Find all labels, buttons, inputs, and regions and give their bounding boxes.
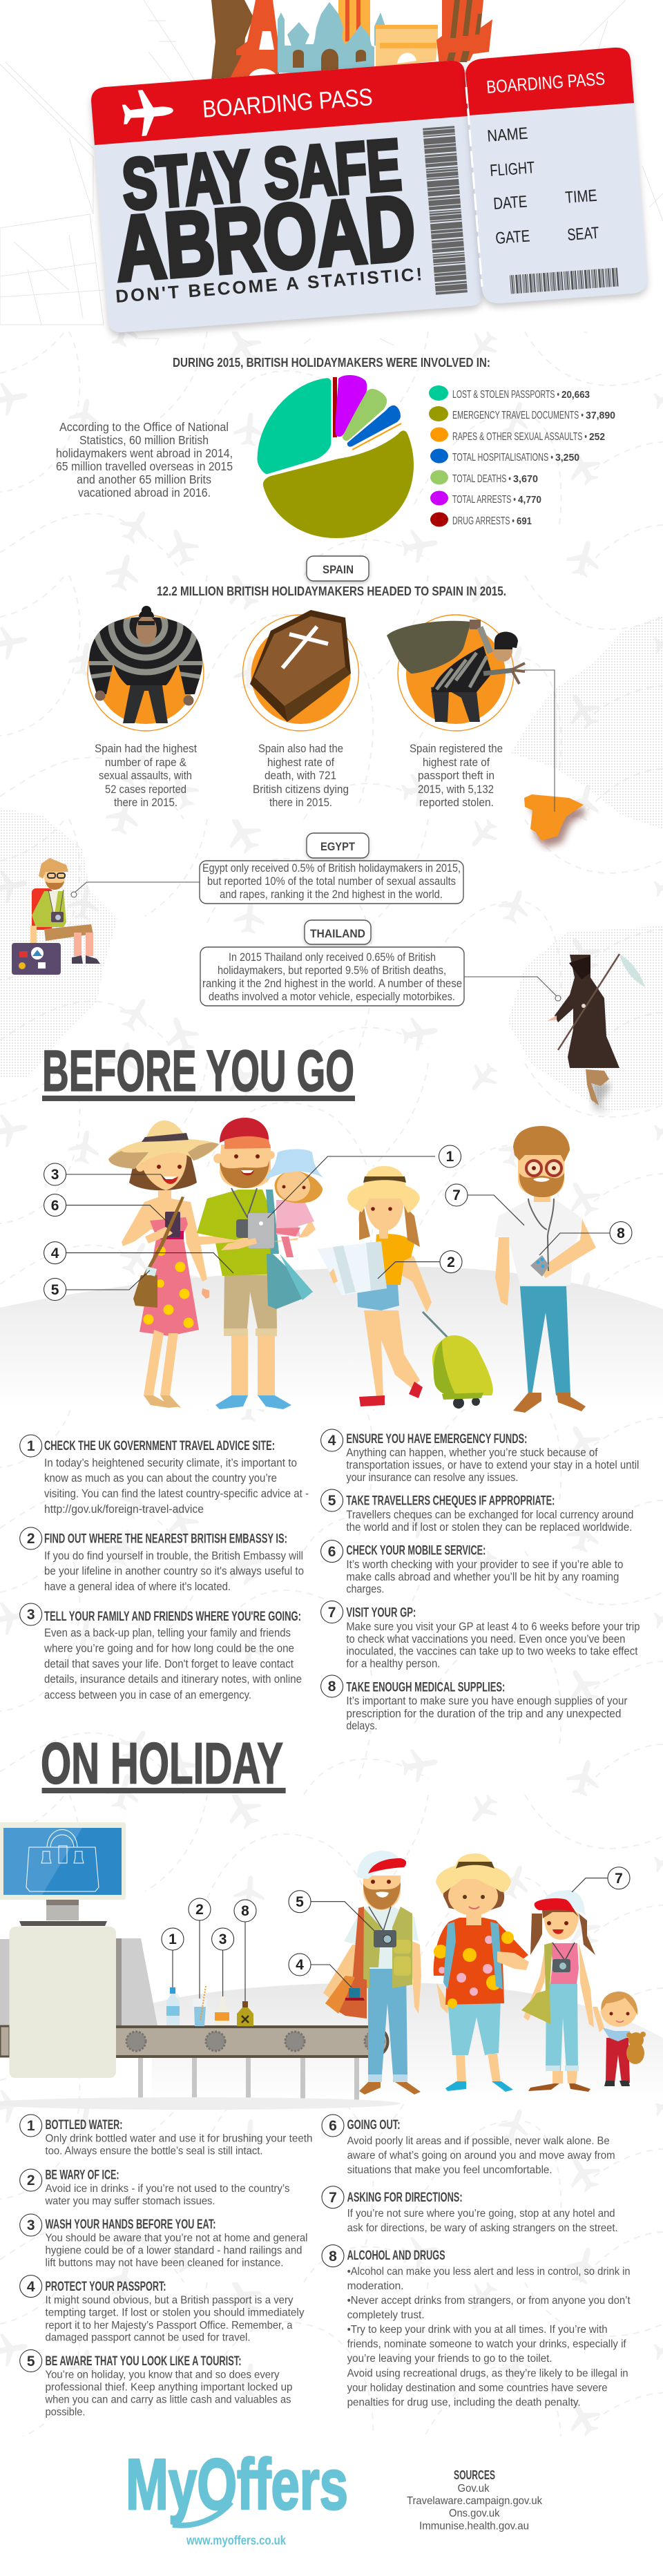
stub barcode	[510, 277, 618, 285]
sources: Ons.gov.uk	[449, 2508, 500, 2519]
list: on holiday right column: moderation.	[347, 2280, 404, 2292]
caption: death statistic: Spain also had the	[258, 742, 343, 755]
panel: death statistic illustration	[243, 610, 359, 731]
list: on holiday right column: •Alcohol can make you less alert and less in control, so drink in	[347, 2266, 631, 2278]
boarding pass main ticket	[91, 61, 482, 332]
list: on holiday right column: •Never accept drinks from strangers, or from anyone you don’t	[347, 2295, 631, 2307]
list: before you go right column: 6	[328, 1544, 336, 1560]
list: before you go right column: It’s important to make sure you have enough supplies of your	[346, 1695, 628, 1708]
panel: egypt text: but reported 10% of the total number of sexual assaults	[207, 875, 456, 888]
list: before you go right column: make calls abroad and whether you’ll be hit by any roaming	[346, 1570, 619, 1583]
character: toddler with teddy	[593, 1992, 646, 2086]
list: on holiday right column: penalties for drug use, including the death penalty.	[347, 2396, 581, 2408]
legend: 20,663	[561, 389, 590, 401]
list: on holiday right column: 8	[329, 2249, 337, 2264]
panel: egypt text: Egypt only received 0.5% of British holidaymakers in 2015,	[202, 861, 461, 875]
list: before you go right column: the world and if lost or stolen they can be replaced worldwide.	[346, 1520, 632, 1534]
list: before you go left column: be your lifeline in another country so it's always useful to	[44, 1564, 304, 1578]
list: on holiday right column: Avoid poorly lit areas and if possible, never walk alone. Be	[347, 2135, 610, 2147]
list: before you go right column: 8	[328, 1679, 336, 1695]
legend: 691	[517, 515, 532, 527]
legend: TOTAL HOSPITALISATIONS •	[452, 452, 553, 464]
legend: LOST & STOLEN PASSPORTS •	[452, 389, 559, 401]
list: before you go right column: TAKE ENOUGH MEDICAL SUPPLIES:	[346, 1680, 505, 1695]
panel: thailand text: In 2015 Thailand only received 0.65% of British	[229, 951, 436, 964]
ground	[0, 1267, 663, 1409]
callouts before you go: 6	[51, 1198, 59, 1214]
title: abroad: ABROAD	[112, 177, 419, 300]
panel: egypt text: and rapes, ranking it the 2nd highest in the world.	[220, 888, 443, 901]
callouts before you go: 8	[617, 1225, 625, 1241]
legend: 3,670	[513, 473, 538, 485]
panel: thailand text: ranking it the 2nd highest in the world. A number of these	[202, 977, 462, 990]
sources	[407, 2468, 543, 2532]
list: before you go left column: TELL YOUR FAMILY AND FRIENDS WHERE YOU'RE GOING:	[44, 1610, 301, 1624]
list: on holiday right column: you’re leaving your friends to go to the toilet.	[347, 2353, 552, 2365]
list: on holiday left column: water you may suffer stomach issues.	[45, 2195, 215, 2207]
legend: 3,250	[555, 452, 579, 464]
caption: death statistic: there in 2015.	[269, 796, 332, 809]
list: on holiday right column: ALCOHOL AND DRUGS	[347, 2249, 445, 2263]
caption: passport statistic: passport theft in	[418, 769, 494, 782]
callouts on holiday	[162, 1867, 630, 2001]
list: before you go left column: access between you in case of an emergency.	[44, 1688, 251, 1701]
list: before you go right column: It’s worth checking with your provider to see if you’re able to	[346, 1558, 623, 1571]
character: man with tablet and child	[195, 1118, 323, 1395]
list: before you go right column: delays.	[346, 1719, 377, 1733]
sources: Gov.uk	[457, 2483, 490, 2494]
caption: passport statistic	[410, 742, 503, 809]
list: on holiday left column: professional thief. Keep anything important locked up	[46, 2382, 293, 2394]
panel: passport theft illustration	[387, 615, 525, 731]
sources: SOURCES	[454, 2468, 495, 2482]
legend: TOTAL DEATHS •	[452, 473, 511, 485]
legend: DRUG ARRESTS •	[452, 515, 515, 527]
stub fields: FLIGHT	[489, 158, 536, 180]
landmarks illustration	[211, 0, 492, 80]
main barcode	[439, 127, 452, 294]
map: thailand	[586, 1069, 611, 1114]
list: before you go left column: visiting. You can find the latest country-specific advice at -	[44, 1487, 309, 1500]
badge: thailand: THAILAND	[310, 927, 365, 940]
caption: passport statistic: 2015, with 5,132	[418, 783, 494, 796]
sources: Immunise.health.gov.au	[419, 2520, 529, 2532]
list: before you go left column: have a general idea of where it's located.	[44, 1580, 231, 1593]
callouts before you go: 7	[452, 1187, 461, 1203]
intro text	[56, 420, 233, 499]
list: on holiday left column: Only drink bottled water and use it for brushing your teeth	[46, 2133, 312, 2144]
list: before you go right column: to check what vaccinations you need. Even once you’ve been	[346, 1632, 625, 1645]
list: on holiday right column: 6	[329, 2118, 337, 2134]
icon: plane	[121, 87, 175, 137]
legend: EMERGENCY TRAVEL DOCUMENTS •	[452, 410, 584, 421]
list: on holiday left column: 2	[27, 2173, 35, 2188]
intro text: 65 million travelled overseas in 2015	[56, 459, 233, 473]
callouts on holiday: 4	[296, 1957, 304, 1973]
stub fields	[486, 124, 600, 248]
caption: death statistic: death, with 721	[265, 769, 336, 782]
caption: death statistic	[253, 742, 349, 809]
caption: death statistic: British citizens dying	[253, 783, 349, 796]
panel: rape statistic illustration	[87, 606, 204, 732]
caption: passport statistic: reported stolen.	[419, 796, 494, 809]
list: on holiday right column: If you’re not sure where you’re going, stop at any hotel and	[347, 2208, 615, 2220]
list: on holiday left column: when you can and carry as little cash and valuables as	[45, 2394, 291, 2405]
stub fields: TIME	[564, 187, 597, 207]
list: before you go left column: detail that saves your life. Don't forget to leave contact	[44, 1657, 294, 1670]
pie chart	[258, 375, 414, 538]
list: before you go right column: prescription for the duration of the trip and any unexpected	[346, 1707, 621, 1720]
background world map dots	[0, 615, 663, 1112]
list: before you go left column: FIND OUT WHERE THE NEAREST BRITISH EMBASSY IS:	[44, 1532, 287, 1546]
list: before you go left column: 1	[27, 1438, 35, 1454]
list: on holiday right column: GOING OUT:	[347, 2118, 401, 2133]
list: on holiday left column: possible.	[46, 2406, 86, 2418]
caption: rape statistic: number of rape &	[105, 756, 187, 769]
callouts on holiday: 2	[195, 1902, 204, 1918]
ground holiday	[152, 1983, 663, 2103]
heading: during 2015: DURING 2015, BRITISH HOLIDAYMAKERS WERE INVOLVED IN:	[173, 356, 490, 370]
stub fields: DATE	[492, 192, 528, 213]
callouts before you go: 5	[51, 1282, 59, 1298]
intro text: vacationed abroad in 2016.	[78, 486, 211, 499]
legend: 4,770	[518, 494, 541, 506]
list: before you go right column: TAKE TRAVELLERS CHEQUES IF APPROPRIATE:	[346, 1494, 555, 1509]
panel: thailand text: holidaymakers, but reported 9.5% of British deaths,	[218, 964, 446, 977]
callouts on holiday: 8	[241, 1903, 249, 1919]
legend: RAPES & OTHER SEXUAL ASSAULTS •	[452, 431, 587, 443]
list: on holiday left column	[20, 2115, 312, 2418]
panel: thailand text	[200, 947, 464, 1006]
list: on holiday right column: ask for directions, be wary of asking strangers on the street.	[347, 2222, 618, 2234]
list: before you go right column: CHECK YOUR MOBILE SERVICE:	[346, 1544, 486, 1558]
intro text: and another 65 million Brits	[77, 473, 211, 486]
list: on holiday right column: your holiday destination and some countries have severe	[347, 2382, 608, 2394]
intro text: According to the Office of National	[59, 420, 229, 434]
callouts on holiday: 7	[615, 1871, 623, 1887]
heading: 12.2 million: 12.2 MILLION BRITISH HOLIDAYMAKERS HEADED TO SPAIN IN 2015.	[157, 584, 506, 598]
heading: on holiday: ON HOLIDAY	[41, 1731, 283, 1796]
list: before you go left column: http://gov.uk/foreign-travel-advice	[44, 1502, 204, 1516]
caption: rape statistic: there in 2015.	[114, 796, 177, 809]
list: on holiday left column: lift buttons may not have been cleaned for instance.	[46, 2258, 283, 2269]
intro text: Statistics, 60 million British	[79, 433, 209, 447]
list: on holiday left column: Avoid ice in drinks - if you’re not used to the country’s	[46, 2183, 290, 2195]
callouts on holiday: 5	[296, 1894, 304, 1910]
list: on holiday left column: damaged passport cannot be used for travel.	[46, 2332, 250, 2343]
list: on holiday left column: too. Always ensure the bottle’s seal is still intact.	[46, 2145, 262, 2157]
title: stay safe: STAY SAFE	[119, 125, 404, 225]
list: on holiday left column: 1	[27, 2118, 35, 2134]
list: on holiday right column: Avoid using recreational drugs, as they’re likely to be illegal in	[347, 2368, 628, 2379]
sources: Travelaware.campaign.gov.uk	[407, 2495, 543, 2507]
caption: rape statistic: sexual assaults, with	[99, 769, 192, 782]
caption: passport statistic: Spain registered the	[410, 742, 503, 755]
list: on holiday left column: You should be aware that you’re not at home and general	[46, 2233, 308, 2244]
list: on holiday left column: BE AWARE THAT YOU LOOK LIKE A TOURIST:	[46, 2354, 242, 2369]
list: on holiday right column: friends, nominate someone to watch your drinks, especially if	[347, 2338, 626, 2350]
list: on holiday left column: It might sound obvious, but a British passport is a very	[46, 2295, 293, 2307]
callouts on holiday: 1	[169, 1931, 177, 1947]
stub fields: SEAT	[566, 224, 600, 245]
badge: thailand	[305, 920, 371, 944]
list: before you go right column: 7	[328, 1605, 336, 1621]
list: on holiday right column: •Try to keep your drink with you at all times. If you’re with	[347, 2324, 608, 2336]
connector: thailand	[464, 977, 561, 1001]
list: before you go left column: CHECK THE UK GOVERNMENT TRAVEL ADVICE SITE:	[44, 1439, 275, 1453]
badge: spain	[307, 556, 369, 581]
character: woman with floral shirt	[434, 1853, 529, 2092]
list: on holiday left column: hygiene could be of a lower standard - hand railings and	[46, 2245, 302, 2257]
hero sketch landmarks	[0, 0, 663, 345]
callouts before you go: 1	[446, 1149, 454, 1165]
intro text: holidaymakers went abroad in 2014,	[56, 446, 233, 460]
list: on holiday right column: aware of what’s going on around you and move away from	[347, 2150, 615, 2162]
list: before you go left column: details, insurance details and itinerary notes, with online	[44, 1672, 302, 1686]
caption: rape statistic	[95, 742, 197, 809]
callouts before you go: 2	[447, 1254, 455, 1270]
subtitle: DON'T BECOME A STATISTIC!	[115, 263, 423, 307]
map: spain	[524, 794, 588, 848]
character: woman with sun hat	[108, 1120, 219, 1395]
illustration: scanner monitor	[0, 1822, 126, 1926]
callouts before you go: 3	[51, 1167, 59, 1183]
legend: 252	[589, 431, 605, 443]
list: before you go left column: In today’s heightened security climate, it’s important to	[44, 1456, 297, 1469]
list: before you go left column: 3	[27, 1607, 35, 1623]
list: before you go right column: 5	[328, 1493, 336, 1509]
ticket tear line	[466, 87, 482, 287]
panel: egypt text	[200, 861, 463, 904]
list: before you go right column: Anything can happen, whether you’re stuck because of	[346, 1446, 598, 1459]
character: man with vest	[323, 1851, 421, 2095]
list: before you go left column: where you’re going and for how long could be the one	[44, 1642, 294, 1655]
list: before you go right column: ENSURE YOU HAVE EMERGENCY FUNDS:	[346, 1432, 527, 1447]
list: before you go right column: 4	[328, 1433, 336, 1449]
caption: death statistic: highest rate of	[267, 756, 334, 769]
legend: TOTAL ARRESTS •	[452, 494, 516, 506]
list: on holiday left column: WASH YOUR HANDS BEFORE YOU EAT:	[46, 2217, 215, 2232]
list: on holiday right column: completely trust.	[347, 2309, 425, 2321]
boarding pass stub	[465, 48, 647, 303]
heading: before you go: BEFORE YOU GO	[42, 1038, 354, 1103]
character: man with glasses	[494, 1126, 596, 1413]
legend: 37,890	[586, 410, 615, 421]
list: on holiday left column: 5	[27, 2354, 35, 2369]
callouts before you go	[44, 1145, 632, 1300]
illustration: scanner machine and belt	[0, 1927, 401, 2110]
character: girl with cap	[521, 1890, 595, 2092]
list: before you go right column: your insurance can resolve any issues.	[346, 1471, 518, 1484]
list: before you go right column: VISIT YOUR GP:	[346, 1606, 416, 1621]
caption: rape statistic: 52 cases reported	[105, 783, 186, 796]
list: before you go left column: If you do find yourself in trouble, the British Embassy will	[44, 1549, 303, 1562]
stub fields: NAME	[486, 124, 528, 146]
heading: before you go	[42, 1038, 355, 1103]
logo: myoffers: MyOffers	[126, 2445, 348, 2525]
list: before you go left column	[20, 1435, 309, 1701]
connector: egypt	[71, 882, 200, 897]
caption: rape statistic: Spain had the highest	[95, 742, 197, 755]
badge: spain: SPAIN	[323, 563, 354, 576]
list: before you go left column: 2	[27, 1531, 35, 1547]
list: on holiday left column: BOTTLED WATER:	[46, 2118, 123, 2133]
badge: egypt	[307, 833, 369, 858]
items on belt	[166, 1986, 253, 2026]
list: before you go left column: Even as a back-up plan, telling your family and friends	[44, 1626, 291, 1639]
list: on holiday right column: situations that make you feel uncomfortable.	[347, 2164, 552, 2176]
stub heading: BOARDING PASS	[486, 68, 606, 97]
list: before you go right column	[321, 1429, 640, 1733]
caption: passport statistic: highest rate of	[423, 756, 490, 769]
illustration: grim reaper	[547, 954, 645, 1068]
illustration: traveller with suitcase	[12, 858, 100, 975]
list: on holiday left column: 3	[27, 2217, 35, 2233]
legend	[429, 385, 615, 527]
list: on holiday left column: BE WARY OF ICE:	[46, 2168, 119, 2183]
list: before you go right column: charges.	[346, 1583, 384, 1596]
list: on holiday left column: report it to her Majesty’s Passport Office. Remember, a	[46, 2320, 293, 2331]
character: girl with map and suitcase	[317, 1166, 493, 1409]
text: boarding pass: BOARDING PASS	[202, 84, 374, 123]
list: before you go right column: for a healthy person.	[346, 1657, 440, 1670]
list: on holiday right column	[322, 2115, 631, 2408]
callouts before you go: 4	[51, 1246, 59, 1261]
heading: on holiday	[41, 1731, 286, 1796]
connector: thief to spain	[524, 670, 555, 812]
list: on holiday left column: 4	[27, 2279, 35, 2295]
callouts on holiday: 3	[219, 1931, 227, 1947]
stub fields: GATE	[494, 227, 530, 248]
list: before you go left column: know as much as you can about the country you’re	[44, 1471, 277, 1485]
list: on holiday left column: You’re on holiday, you know that and so does every	[46, 2369, 279, 2381]
list: on holiday right column: ASKING FOR DIRECTIONS:	[347, 2191, 463, 2205]
badge: egypt: EGYPT	[320, 840, 356, 853]
list: on holiday left column: tempting target. If lost or stolen you should immediately	[46, 2307, 304, 2319]
shoes and feet of group	[144, 1395, 291, 1409]
logo url: www.myoffers.co.uk	[186, 2534, 287, 2548]
list: on holiday right column: 7	[329, 2190, 337, 2206]
list: on holiday left column: PROTECT YOUR PASSPORT:	[46, 2280, 166, 2294]
panel: thailand text: deaths involved a motor vehicle, especially motorbikes.	[209, 990, 455, 1003]
